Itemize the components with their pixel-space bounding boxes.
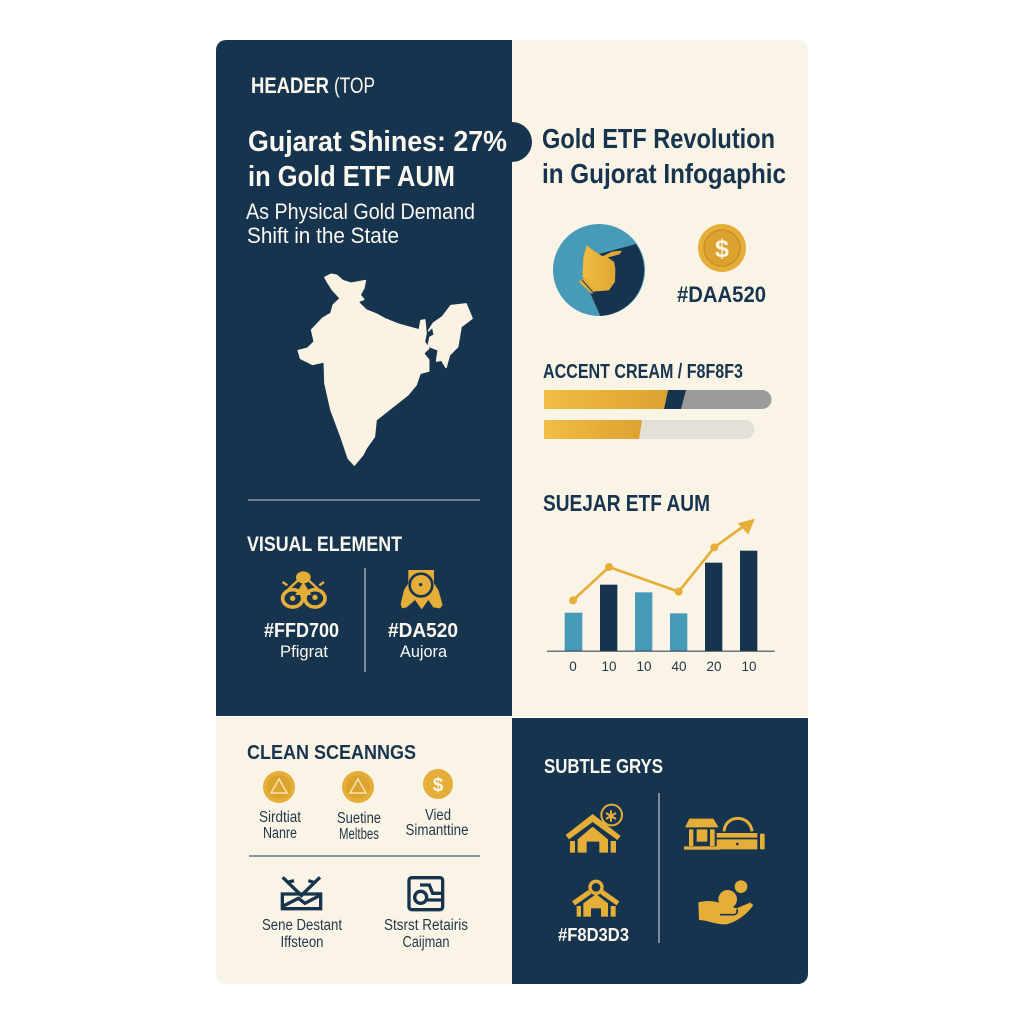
- chart axis labels: 10: [636, 659, 652, 674]
- stat: DA520: [388, 620, 458, 661]
- trend line with arrow: [569, 519, 755, 604]
- heading: subtle grys: SUBTLE GRYS: [544, 756, 663, 778]
- caption 1: Nanre: [263, 825, 297, 842]
- bar chart: [547, 519, 775, 652]
- caption 3: Vied: [425, 807, 451, 824]
- panel: top-left navy header: [216, 40, 512, 716]
- icon: gold network: [283, 571, 325, 607]
- icon: coin triangle 1: [263, 771, 295, 803]
- coin label: #DAA520: [677, 282, 766, 307]
- stat: FFD700: Pfigrat: [280, 642, 328, 661]
- icon: hand with coins: [698, 880, 753, 924]
- icon: crossed basket: [282, 877, 321, 909]
- map: India silhouette: [298, 274, 472, 465]
- panel: bottom-left cream: [216, 717, 512, 984]
- main title: in Gold ETF AUM: [248, 161, 455, 193]
- caption 5: Caijman: [402, 934, 450, 951]
- main title: Gujarat Shines: 27%: [248, 126, 507, 158]
- progress bar 1: [544, 390, 772, 409]
- caption 3: Simanttine: [406, 822, 468, 839]
- heading: chart: SUEJAR ETF AUM: [543, 490, 710, 516]
- icon: shop and case: [684, 818, 765, 850]
- icon: gold dollar coin: $: [715, 235, 729, 263]
- chart axis labels: [569, 659, 757, 674]
- chart axis labels: 0: [569, 659, 577, 674]
- heading: clean: CLEAN SCEANNGS: [247, 741, 416, 764]
- icon: thumbs up badge: [553, 224, 645, 316]
- header label: (TOP: [334, 73, 375, 98]
- vertical divider: [658, 793, 660, 943]
- chart axis labels: 20: [706, 659, 722, 674]
- icon: framed dial: [409, 878, 443, 910]
- subtitle: Shift in the State: [247, 223, 399, 248]
- stat: FFD700: #FFD700: [264, 620, 339, 642]
- caption 4: Sene Destant: [262, 917, 343, 934]
- caption 4: [262, 917, 343, 951]
- panel: bottom-right navy: [512, 718, 808, 984]
- caption 4: Iffsteon: [280, 934, 324, 951]
- right title: in Gujorat Infogaphic: [542, 158, 786, 189]
- subtitle: As Physical Gold Demand: [246, 199, 475, 224]
- right title: Gold ETF Revolution: [542, 123, 775, 154]
- caption 3: [406, 807, 468, 839]
- caption 5: [384, 917, 468, 951]
- horizontal divider: [249, 856, 480, 857]
- chart axis labels: 10: [741, 659, 757, 674]
- icon: coin triangle 2: [342, 771, 374, 803]
- caption 2: [337, 810, 381, 843]
- heading: accent cream: ACCENT CREAM / F8F8F3: [543, 361, 743, 383]
- icon: gold shield figure: [401, 570, 443, 609]
- stat: FFD700: [264, 620, 339, 661]
- stat: DA520: Aujora: [400, 642, 448, 661]
- subtitle: [246, 199, 475, 248]
- divider line: [248, 500, 480, 501]
- vertical divider: [364, 568, 366, 672]
- caption 5: Stsrst Retairis: [384, 917, 468, 934]
- caption 2: Suetine: [337, 810, 381, 827]
- caption 1: [259, 809, 302, 842]
- stat: DA520: #DA520: [388, 620, 458, 642]
- panel: top-right cream: [512, 40, 808, 717]
- caption 2: Meltbes: [339, 826, 379, 843]
- heading: visual element: VISUAL ELEMENT: [247, 533, 402, 556]
- icon: dollar coin: [423, 769, 453, 799]
- notch: connector bump: [512, 122, 532, 162]
- icon: house with badge: [566, 805, 622, 853]
- chart axis labels: 40: [671, 659, 687, 674]
- progress bar 2: [544, 420, 754, 439]
- icon: house with circle: [572, 881, 619, 917]
- header label: HEADER: [251, 73, 329, 98]
- right title: [542, 123, 786, 189]
- icon: dollar coin: $: [433, 775, 444, 796]
- caption 1: Sirdtiat: [259, 809, 302, 826]
- stat: F8D3D3: #F8D3D3: [558, 925, 629, 945]
- main title: [248, 126, 507, 193]
- chart axis labels: 10: [601, 659, 617, 674]
- icon: gold dollar coin: [698, 224, 746, 272]
